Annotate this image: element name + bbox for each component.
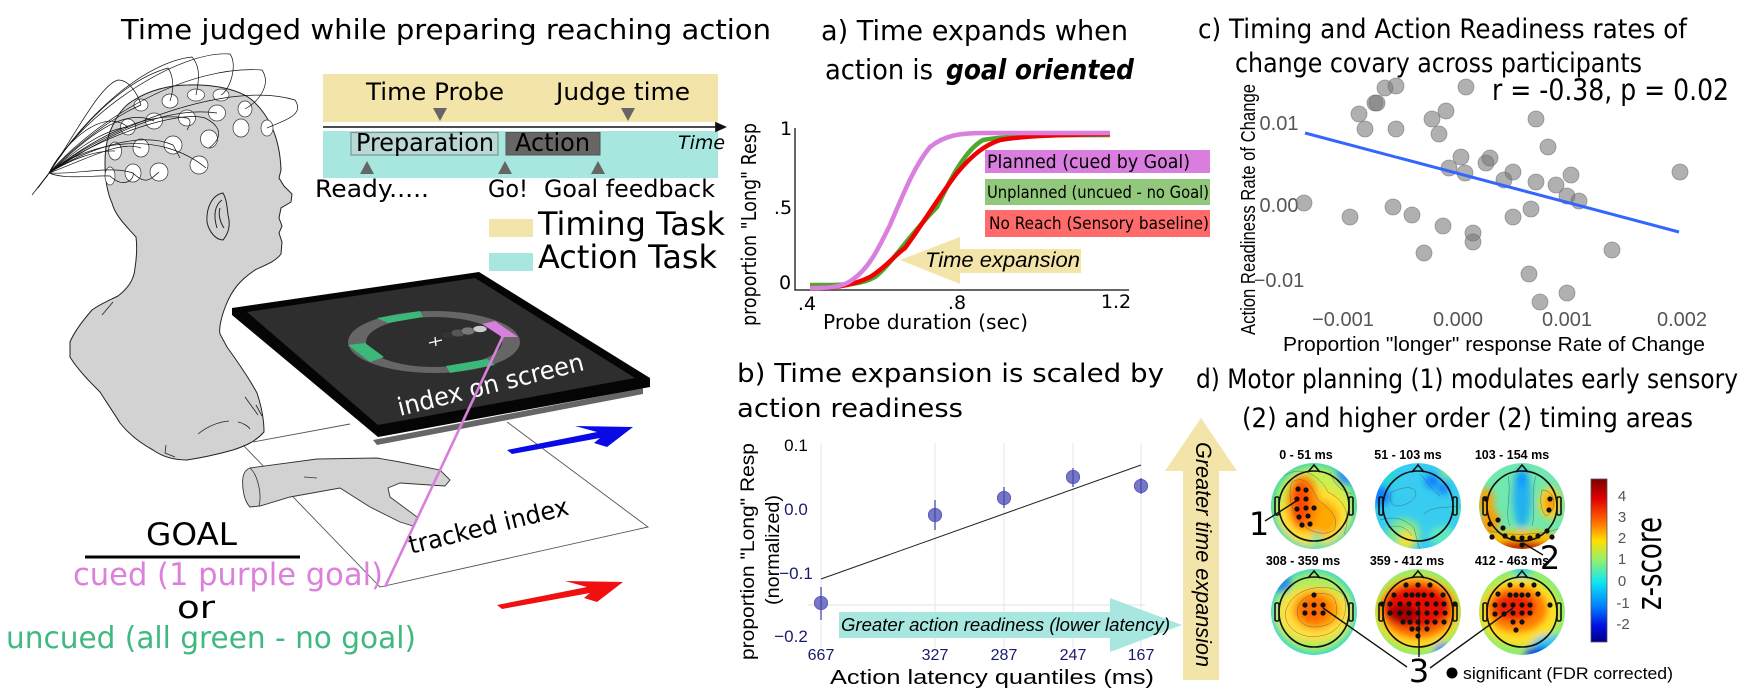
colorbar: 4 — [1618, 488, 1626, 505]
scatter plot: 0.000 — [1433, 309, 1483, 331]
scatter plot: Proportion "longer" response Rate of Change — [1283, 334, 1705, 356]
arrow: greater action readiness: Greater action readiness (lower latency) — [841, 615, 1170, 635]
topomap time labels: 412 - 463 ms — [1475, 554, 1549, 568]
time arrow — [323, 123, 725, 131]
arrow: red — [497, 581, 623, 609]
curve legend: Unplanned (uncued - no Goal) — [987, 183, 1209, 203]
latency chart: 667 — [808, 647, 834, 664]
task legend: Timing Task — [537, 205, 725, 243]
colorbar: 0 — [1618, 573, 1626, 590]
psychometric chart: .8 — [948, 292, 966, 314]
psychometric chart: 1 — [780, 118, 792, 140]
purple tracking line — [385, 336, 503, 587]
heading a — [821, 14, 1135, 86]
monitor — [232, 272, 650, 445]
topomap time labels: 103 - 154 ms — [1475, 448, 1549, 462]
uncued text: uncued (all green - no goal) — [6, 621, 416, 656]
topomap time labels: 308 - 359 ms — [1266, 554, 1340, 568]
title: Time judged while preparing reaching action — [120, 13, 771, 46]
arrow: greater action readiness — [839, 598, 1182, 652]
goal legend — [6, 517, 416, 656]
EEG electrodes — [105, 89, 273, 185]
task legend — [489, 205, 725, 276]
panel: trial timeline: Preparation — [356, 128, 494, 157]
heading c: c) Timing and Action Readiness rates of — [1198, 14, 1688, 45]
latency chart — [738, 436, 1182, 689]
psychometric chart — [737, 118, 1210, 334]
topomap: 51-103 ms — [1370, 463, 1464, 550]
panel d — [1196, 364, 1738, 690]
latency chart: (normalized) — [763, 495, 784, 605]
topomap time labels: 359 - 412 ms — [1370, 554, 1444, 568]
panel: trial timeline: Time — [678, 132, 725, 154]
regression line — [1305, 133, 1679, 232]
heading a: action is — [825, 53, 933, 86]
or text: or — [177, 590, 215, 626]
scatter plot: 0.00 — [1260, 195, 1298, 217]
icon: ear — [207, 193, 229, 240]
topomap time labels — [1266, 448, 1549, 568]
purple curve — [810, 133, 1110, 288]
psychometric chart: Probe duration (sec) — [823, 310, 1028, 334]
goal legend: GOAL — [146, 517, 238, 553]
significance legend: significant (FDR corrected) — [1463, 664, 1673, 683]
target ring — [348, 311, 520, 373]
heading c: change covary across participants — [1235, 48, 1642, 79]
latency chart: −0.1 — [779, 564, 813, 583]
heading a: a) Time expands when — [821, 14, 1128, 47]
latency chart: 0.1 — [784, 436, 808, 455]
preparation box — [351, 132, 498, 155]
panel: experimental setup — [32, 13, 771, 460]
fit line — [821, 465, 1141, 579]
latency chart: 287 — [991, 647, 1017, 664]
psychometric chart: 1.2 — [1101, 291, 1131, 313]
topomap: 412-463 ms — [1479, 569, 1565, 655]
topomap: 0-51 ms — [1269, 461, 1359, 551]
heading b — [737, 359, 1164, 424]
action box — [506, 132, 600, 155]
topomap: 308-359 ms — [1269, 567, 1359, 657]
scatter plot: −0.001 — [1312, 309, 1374, 331]
curve legend: No Reach (Sensory baseline) — [989, 214, 1209, 234]
fixation cross — [429, 337, 442, 346]
panel c — [1198, 14, 1729, 356]
red curve — [810, 134, 1110, 288]
topomap time labels: 0 - 51 ms — [1279, 448, 1333, 462]
psychometric chart: .5 — [774, 197, 792, 219]
colorbar — [1591, 479, 1670, 642]
psychometric chart: 0 — [779, 272, 791, 294]
colorbar: -2 — [1616, 616, 1630, 633]
timeline labels: Time Probe — [365, 78, 504, 106]
scatter plot: 0.01 — [1260, 113, 1298, 135]
latency chart: 247 — [1060, 647, 1086, 664]
green goals — [348, 311, 495, 373]
latency chart: proportion "Long" Resp — [738, 443, 759, 660]
heading a: goal oriented — [946, 53, 1135, 86]
latency chart: Action latency quantiles (ms) — [830, 667, 1154, 689]
panel: trial timeline: Go! — [488, 175, 528, 203]
colorbar: 3 — [1618, 509, 1626, 526]
callout lines — [1265, 500, 1543, 668]
topomap: 359-412 ms — [1375, 569, 1461, 661]
arrow: time expansion — [900, 237, 1081, 284]
psychometric chart: proportion "Long" Resp — [737, 123, 761, 326]
label: tracked index: tracked index — [405, 492, 572, 560]
heading b: action readiness — [737, 394, 963, 424]
panel: trial timeline: Judge time — [554, 78, 690, 106]
heading b: b) Time expansion is scaled by — [737, 359, 1164, 389]
scatter plot: 0.001 — [1542, 309, 1592, 331]
latency chart: 0.0 — [784, 500, 808, 519]
hand — [243, 458, 450, 526]
scatter plot: 0.002 — [1657, 309, 1707, 331]
scatter plot: −0.01 — [1254, 270, 1304, 292]
callout 3: 3 — [1409, 652, 1429, 690]
curve legend — [985, 150, 1210, 237]
data points — [1296, 78, 1688, 310]
colorbar title: z-score — [1630, 517, 1670, 610]
colorbar: 2 — [1618, 530, 1626, 547]
latency chart: 167 — [1128, 647, 1154, 664]
EEG wires — [32, 54, 298, 195]
scatter plot: Action Readiness Rate of Change — [1238, 84, 1260, 335]
label: index on screen: index on screen — [394, 347, 587, 422]
latency chart: 327 — [922, 647, 948, 664]
heading d: (2) and higher order (2) timing areas — [1242, 403, 1693, 434]
panel: trial timeline — [315, 74, 725, 203]
scatter plot — [1238, 78, 1707, 356]
panel b — [737, 359, 1237, 689]
cued text: cued (1 purple goal) — [73, 557, 383, 593]
participant head and bust — [70, 85, 292, 460]
colorbar: 1 — [1618, 551, 1626, 568]
panel: tracking plane — [243, 422, 648, 587]
topomap time labels: 51 - 103 ms — [1374, 448, 1442, 462]
index trail — [441, 326, 487, 339]
latency chart: −0.2 — [774, 627, 808, 646]
psychometric chart: .4 — [798, 293, 816, 315]
heading d — [1196, 364, 1738, 434]
heading c — [1198, 14, 1688, 79]
data points — [814, 468, 1148, 620]
panel: trial timeline: Ready..... — [315, 175, 429, 203]
arrow: time expansion: Time expansion — [925, 249, 1080, 272]
colorbar: -1 — [1616, 595, 1630, 612]
panel: trial timeline: Goal feedback — [544, 175, 715, 203]
purple goal — [482, 321, 518, 337]
arrow: greater time expansion: Greater time expansion — [1191, 442, 1216, 667]
callout 1: 1 — [1249, 505, 1269, 543]
event markers — [360, 108, 635, 174]
panel: trial timeline: Action — [515, 128, 590, 157]
arrow: blue — [507, 426, 633, 454]
task legend: Action Task — [538, 238, 717, 276]
callout 2: 2 — [1540, 539, 1560, 577]
arrow: greater time expansion — [1165, 418, 1237, 680]
panel a — [737, 14, 1210, 334]
green curve — [810, 135, 1110, 285]
curve legend: Planned (cued by Goal) — [987, 151, 1190, 173]
topomap: 103-154 ms — [1478, 463, 1566, 556]
